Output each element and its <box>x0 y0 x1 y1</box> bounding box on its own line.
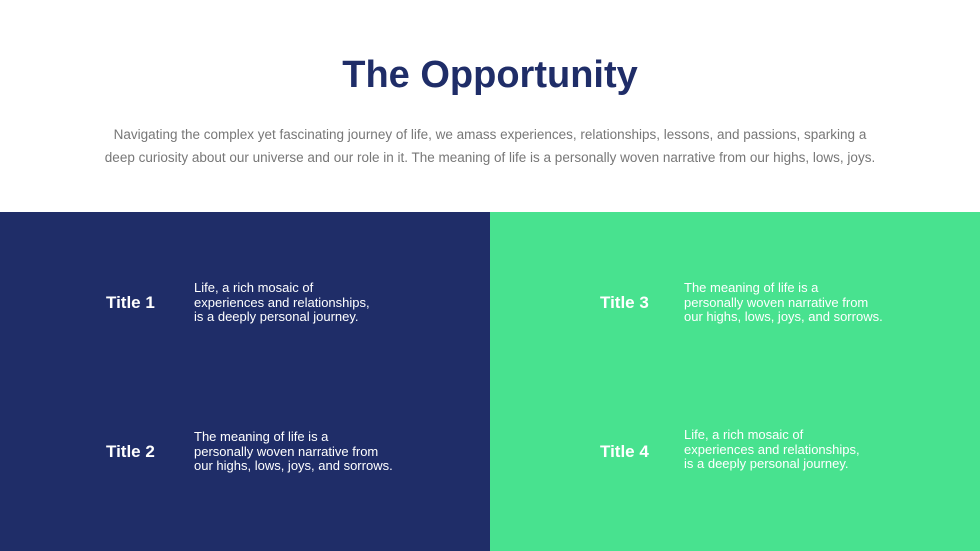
text block: intro: Navigating the complex yet fascinating journey of life, we amass experiences, relationships, lessons, and passions, sparking a deep curiosity about our universe and our role in it. The meaning of life is a personally woven narrative from our highs, lows, joys. <box>105 127 875 165</box>
text block: Title 3 description <box>684 280 883 324</box>
text block: Title 1 description: Life, a rich mosaic of <box>194 280 313 295</box>
heading: Title 2: Title 2 <box>106 442 155 461</box>
heading: Title 4: Title 4 <box>600 442 649 461</box>
text block: Title 3 description: personally woven narrative from <box>684 294 868 310</box>
text block: Title 3 description: The meaning of life is a <box>684 280 818 295</box>
text block: Title 1 description: is a deeply personal journey. <box>194 309 359 324</box>
text block: Title 2 description <box>194 429 393 473</box>
title: The Opportunity <box>342 54 638 96</box>
panel: left navy <box>0 212 490 551</box>
text block: Title 2 description: our highs, lows, joys, and sorrows. <box>194 458 393 473</box>
text block: Title 1 description: experiences and relationships, <box>194 294 370 310</box>
heading: Title 3: Title 3 <box>600 293 649 312</box>
text block: Title 3 description: our highs, lows, joys, and sorrows. <box>684 309 883 324</box>
text block: Title 4 description: Life, a rich mosaic of <box>684 427 803 442</box>
text block: Title 1 description <box>194 280 370 324</box>
text block: Title 4 description <box>684 427 860 471</box>
text block: Title 4 description: experiences and relationships, <box>684 442 860 456</box>
text block: Title 2 description: personally woven narrative from <box>194 444 378 458</box>
panel: right green <box>490 212 980 551</box>
heading: Title 1: Title 1 <box>106 293 155 312</box>
text block: Title 4 description: is a deeply personal journey. <box>684 456 849 471</box>
text block: Title 2 description: The meaning of life is a <box>194 429 328 444</box>
